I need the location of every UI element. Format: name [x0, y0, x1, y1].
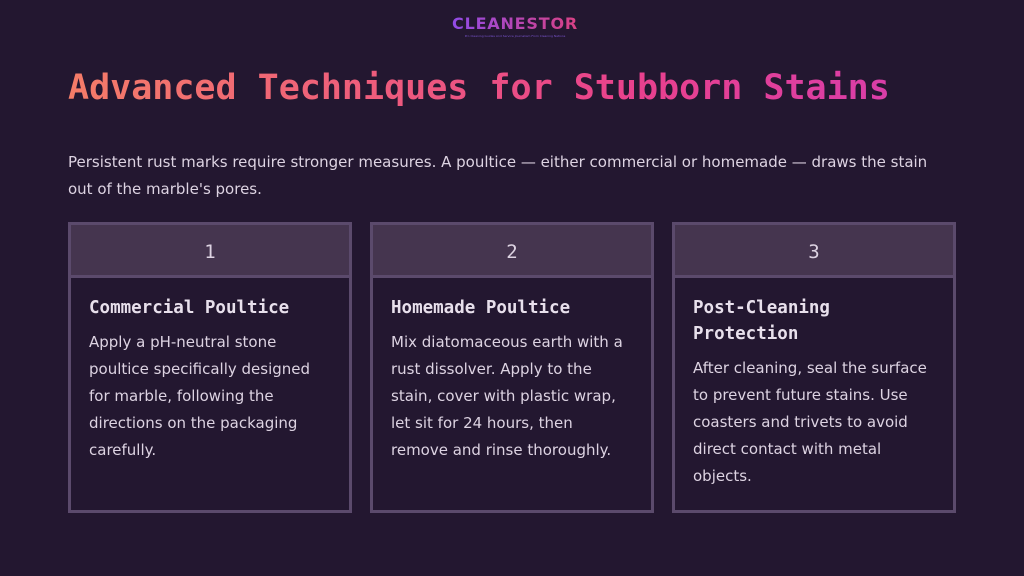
- step 3 body: [693, 298, 927, 485]
- step number 3: 3: [808, 241, 820, 263]
- step number 1: [71, 225, 349, 278]
- step 3 body: Post-Cleaning Protection: [693, 298, 830, 344]
- intro text: Persistent rust marks require stronger measures. A poultice — either commercial or homemade — draws the stain out of the marble's pores.: [68, 153, 927, 198]
- logo: CLEANESTOR: [452, 14, 578, 33]
- step number 3: [675, 225, 953, 278]
- step 2 body: Homemade Poultice: [391, 298, 570, 318]
- step 3 body: After cleaning, seal the surface to prevent future stains. Use coasters and trivets to avoid direct contact with metal objects.: [693, 359, 927, 485]
- step number 2: [373, 225, 651, 278]
- step number 1: 1: [204, 241, 216, 263]
- logo: Pro Cleaning Guides And Service Journalism From Cleaning Nations: [465, 34, 565, 38]
- step 1 body: Apply a pH-neutral stone poultice specifically designed for marble, following the directions on the packaging carefully.: [89, 333, 310, 459]
- panel: step 3: [672, 222, 956, 513]
- step 2 body: Mix diatomaceous earth with a rust dissolver. Apply to the stain, cover with plastic wrap, let sit for 24 hours, then remove and rinse thoroughly.: [391, 333, 623, 459]
- step 1 body: Commercial Poultice: [89, 298, 289, 318]
- panel: step 2: [370, 222, 654, 513]
- title: Advanced Techniques for Stubborn Stains: [68, 68, 890, 108]
- step number 2: 2: [506, 241, 518, 263]
- panel: step 1: [68, 222, 352, 513]
